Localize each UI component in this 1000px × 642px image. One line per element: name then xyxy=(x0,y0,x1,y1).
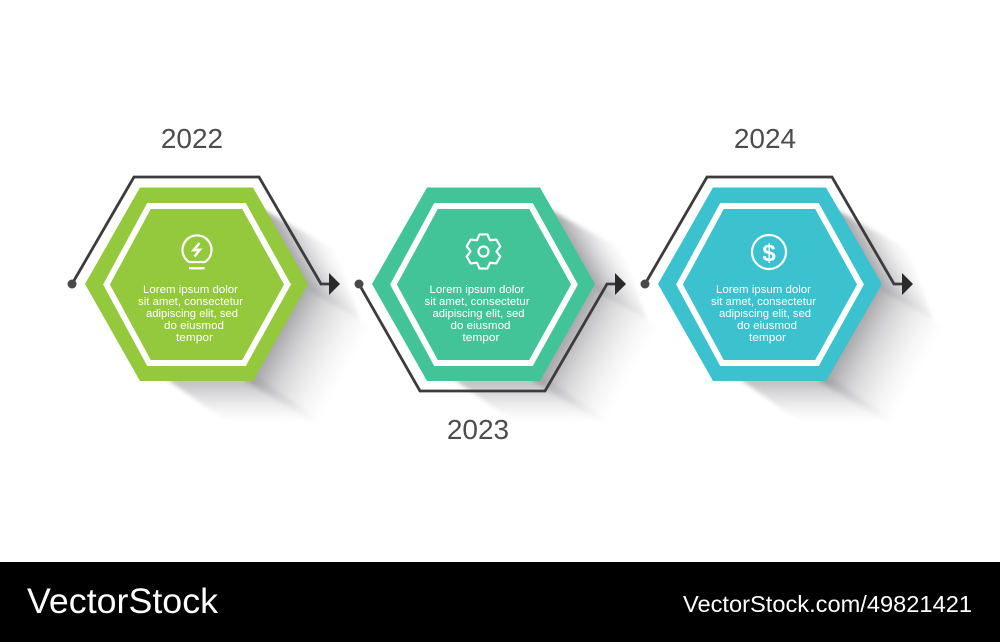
step 2022 xyxy=(68,123,392,425)
body text 2022: tempor xyxy=(176,332,213,344)
year 2023: 2023 xyxy=(447,414,509,445)
inner hexagon 2022 xyxy=(106,206,288,363)
footer logo text: VectorStock xyxy=(27,582,219,621)
year 2024: 2024 xyxy=(734,123,796,154)
connector line 2023 xyxy=(359,284,618,391)
body text 2024: tempor xyxy=(749,332,786,344)
start dot 2024 xyxy=(640,280,650,288)
body text 2024: Lorem ipsum dolor xyxy=(716,284,811,296)
shadow 2022 xyxy=(165,205,392,425)
year 2022: 2022 xyxy=(161,123,223,154)
step 2023 xyxy=(354,188,679,445)
hexagon 2023 xyxy=(372,188,595,381)
icon: gear xyxy=(467,234,500,269)
shadow 2024 xyxy=(738,205,965,425)
body text 2024: do eiusmod xyxy=(737,320,797,332)
inner hexagon 2024 xyxy=(680,206,860,363)
connector line 2022 xyxy=(72,177,332,284)
arrowhead 2024 xyxy=(902,273,913,295)
body text 2024: adipiscing elit, sed xyxy=(719,308,811,320)
arrowhead 2022 xyxy=(329,273,340,295)
body text 2022: do eiusmod xyxy=(164,320,224,332)
icon: dollar coin xyxy=(752,235,786,269)
shadow 2023 xyxy=(452,205,679,425)
start dot 2023 xyxy=(354,280,364,288)
hexagon 2022 xyxy=(85,188,308,381)
body text 2022: Lorem ipsum dolor xyxy=(143,284,238,296)
inner hexagon 2023 xyxy=(394,206,574,363)
body text 2023: do eiusmod xyxy=(450,320,510,332)
start dot 2022 xyxy=(68,280,76,288)
body text 2023: Lorem ipsum dolor xyxy=(430,284,525,296)
step 2024 xyxy=(640,123,965,425)
icon: light bulb xyxy=(182,235,211,269)
body text 2022: sit amet, consectetur xyxy=(138,296,243,308)
body text 2022: adipiscing elit, sed xyxy=(146,308,238,320)
footer bar xyxy=(0,562,1000,642)
arrowhead 2023 xyxy=(615,273,626,295)
icon: dollar coin: $ xyxy=(762,240,776,267)
body text 2024: sit amet, consectetur xyxy=(711,296,816,308)
body text 2023: sit amet, consectetur xyxy=(424,296,530,308)
hexagon 2024 xyxy=(658,188,882,381)
body text 2023: adipiscing elit, sed xyxy=(432,308,524,320)
footer url text: VectorStock.com/49821421 xyxy=(683,591,972,617)
body text 2023: tempor xyxy=(462,332,500,344)
connector line 2024 xyxy=(645,177,905,284)
